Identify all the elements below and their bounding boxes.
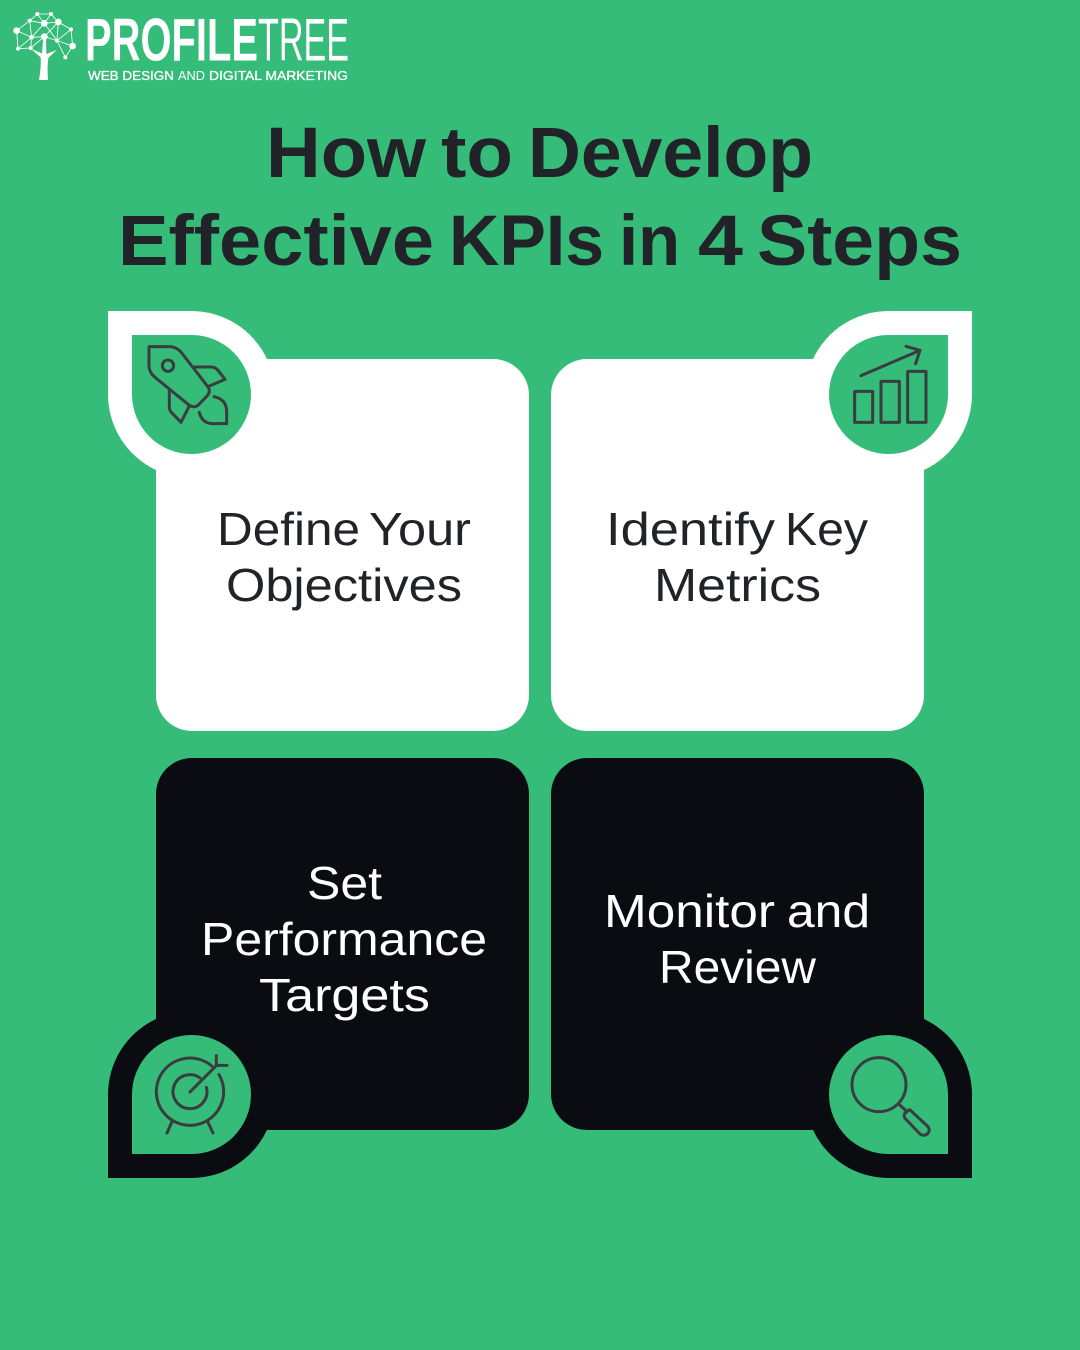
panel: step 2 Identify Key Metrics (551, 311, 972, 731)
step label: Performance (201, 913, 487, 965)
step label: Targets (259, 969, 430, 1021)
icon: target (132, 1035, 251, 1154)
step label: Identify (606, 503, 775, 555)
title: in (619, 202, 680, 281)
step label: Set (307, 857, 382, 909)
title: KPIs (449, 202, 604, 281)
step label: Monitor (604, 885, 775, 937)
panel: step 4 Monitor and Review (551, 758, 972, 1178)
title: 4 (698, 202, 744, 281)
step label: Key (785, 503, 868, 555)
step label: Review (659, 941, 817, 993)
logo wordmark: PROFILE (85, 6, 258, 74)
logo tagline (88, 68, 348, 83)
title: Effective (118, 202, 434, 281)
step label (606, 503, 868, 611)
step label: Your (369, 503, 471, 555)
logo tagline: DIGITAL MARKETING (209, 68, 348, 83)
step label (604, 885, 870, 993)
card background (108, 311, 529, 731)
title: How (266, 114, 427, 193)
step label: Metrics (654, 559, 821, 611)
card background (551, 758, 972, 1178)
step label (217, 503, 471, 611)
logo: ProfileTree: TREE (258, 6, 349, 74)
title: Steps (757, 202, 962, 281)
panel: step 3 Set Performance Targets (108, 758, 529, 1178)
icon: rocket (132, 335, 251, 454)
card background (551, 311, 972, 731)
card background (108, 758, 529, 1178)
step label: Define (217, 503, 360, 555)
logo: ProfileTree (13, 6, 349, 83)
title: to (441, 114, 513, 193)
title: Develop (528, 114, 813, 193)
panel: step 1 Define Your Objectives (108, 311, 529, 731)
step label: Objectives (226, 559, 462, 611)
icon: magnifying glass (829, 1035, 948, 1154)
step label (201, 857, 487, 1021)
step label: and (787, 885, 870, 937)
title (118, 114, 962, 281)
logo tagline: AND (178, 68, 205, 83)
icon: network tree (13, 12, 76, 80)
logo tagline: WEB DESIGN (88, 68, 174, 83)
icon: rising bar chart (829, 335, 948, 454)
